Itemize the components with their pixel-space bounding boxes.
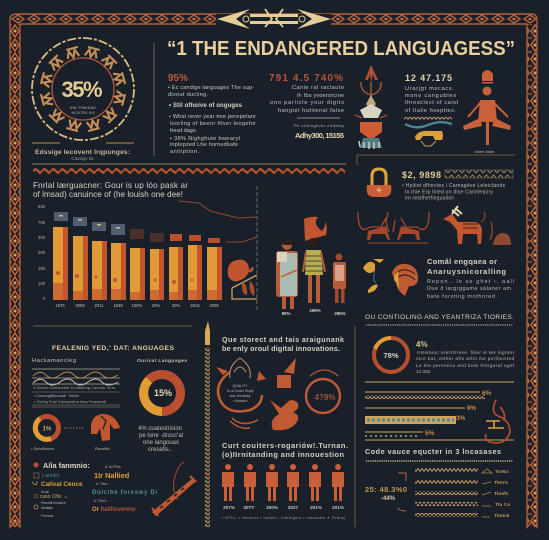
medallion caption: Edssige Iecovent lrqpunges: [35, 149, 130, 156]
top center ornament [216, 9, 331, 29]
x axis labels: 100% [132, 303, 143, 308]
dotted connector [64, 427, 84, 429]
icon: padlock [367, 169, 391, 197]
stat block: 95%: inplepzed Lhe hornedkafe [170, 142, 238, 148]
dotted divider [366, 324, 513, 326]
icon: tribal totem figure [355, 65, 387, 149]
pictogram row: 201% [310, 505, 322, 510]
person 5 [309, 464, 321, 501]
people figures with percentages [276, 217, 346, 316]
callout text: bate forsting mothored. [427, 294, 497, 300]
divider [153, 43, 155, 156]
stat block: 740%: hangtel hutitenal false [278, 108, 344, 114]
cycle diagram: Isas therdoby [229, 394, 251, 398]
percentage bars: 9% [467, 405, 477, 412]
x axis labels: 1548 [113, 303, 123, 308]
pattern rows: TlwYs [494, 480, 508, 486]
y axis labels: 0 [43, 296, 46, 301]
mixed typographic list: ☐ caso Cifix ..ω [34, 494, 68, 500]
icon caption: Intlex Main [475, 149, 494, 154]
y axis labels: 700 [38, 220, 46, 225]
pictogram row: 207% [223, 505, 235, 510]
donut text: 4% [416, 340, 428, 349]
icon: garment [91, 414, 120, 451]
donut chart: 15%: 15% [154, 388, 172, 398]
stat block: 17 175: Urarjgt mscacs. [405, 86, 454, 92]
icon: device and horn [270, 358, 298, 430]
medallion: 35% [32, 38, 134, 140]
donut text: oice bat, vother afio witin me perlisucted [416, 356, 514, 361]
figure 2 [303, 217, 327, 303]
stat block: 17 175: of Italie hsepties. [405, 108, 456, 114]
section divider and pattern band [32, 155, 515, 174]
callout text: Due d largrggame sàlaner am [427, 286, 512, 292]
icon: mirrored animals [358, 212, 429, 243]
icon: woven band and jaguar [404, 117, 452, 146]
mixed typographic list: Pannidl imoshce [41, 501, 66, 505]
people figures with percentages: 90% [282, 311, 290, 316]
x axis labels: 2516 [190, 303, 200, 308]
medallion caption [32, 143, 134, 161]
pictogram legend: ▪ NTICₛ ▪ Sensors ▪ Iloslis ▪ Callingers ▪ Innovatio ✦ Fediay [222, 516, 345, 520]
subheadings: Ourical Languages [137, 358, 187, 364]
stat block: 95%: • 38% Nighghute bwearyt [170, 136, 240, 142]
stat block: 95%: divout ducling. [168, 92, 208, 98]
x axis labels: 2011 [94, 303, 104, 308]
wave chart and legend: • Cnsronglfkisocad8 · Ihsfha [34, 394, 79, 398]
wave chart and legend: 4 Cboslv Aurisnshor Exitdalling Cacontr Intrs [33, 386, 115, 390]
y axis labels: 150 [38, 266, 46, 271]
icon: fruit and leaf [228, 260, 257, 299]
vertical text strip [205, 321, 210, 527]
mixed typographic list: ᐅ Iar Fhis [105, 465, 121, 469]
stat: 25:48.3: 25: 48.3%0 [365, 485, 407, 494]
icon: garment: Roustlet [95, 446, 111, 451]
icon: figure with crown [463, 70, 511, 145]
mixed typographic list [32, 461, 157, 518]
small donut: 1%: 1% [43, 426, 52, 432]
stat block: 740%: Ph outlingever efidatky [294, 123, 344, 128]
stat block: 95% [168, 73, 256, 155]
pictogram row: 20TY [244, 505, 254, 510]
medallion: 35%: EW, PNIKDAE [70, 105, 96, 110]
stat block: 740% [269, 73, 344, 140]
y axis labels: 300 [38, 235, 46, 240]
chart heading [33, 181, 188, 199]
stat block: 740%: Adhy300, 15155 [295, 131, 344, 140]
dotted divider [366, 460, 513, 462]
subheadings: Hackamancleg [32, 358, 76, 364]
icon: flute [152, 462, 196, 516]
donut text: Le the perninice and bute thilrgaral ogel [416, 363, 514, 368]
percentage bars: 3% [456, 415, 466, 422]
people figures with percentages: 285% [334, 311, 346, 316]
mixed typographic list: Lanckil [42, 473, 59, 479]
pictogram row [222, 464, 344, 510]
title: “1 THE ENDANGERED LANGUAGESS” [167, 38, 515, 60]
heading: turnan: (o)IIrnitanding and innouestion [222, 450, 344, 459]
icon: head in headdress with leaves [363, 259, 418, 296]
section heading: OU CONTIOLING AND YEANTRIZA TIORIES. [365, 314, 514, 321]
person 1 [222, 464, 234, 501]
lower-left divider [33, 325, 192, 327]
donut text [138, 426, 183, 453]
mixed typographic list: Kcusi [41, 490, 49, 494]
heading: digital innovations: Que storect and tais araigunank [222, 335, 344, 344]
donut: 479%: 4?9% [315, 393, 335, 402]
cap boxes [54, 212, 220, 243]
small donut: 1%: • Qinlufichuirs [31, 447, 54, 451]
pictogram row: 201% [332, 505, 344, 510]
stat block: 95%: antiiption. [170, 149, 199, 155]
percentage bars [365, 382, 514, 440]
x axis labels [55, 303, 219, 308]
donut text [416, 340, 515, 374]
heading: digital innovations [222, 335, 344, 353]
text block: • Hpiliot dfhectes l Carnagéve Leleiclands [402, 183, 506, 189]
heading: code value: Code vauce equcter in 3 lncasases [365, 447, 501, 456]
donut text: 12.302. [416, 369, 431, 374]
pattern rows: TorKs [495, 469, 509, 475]
percentage bars: 5% [425, 430, 435, 437]
person 6 [332, 464, 344, 501]
stat block: 740%: ono parlicle your digits [270, 100, 344, 106]
small donut: 1% [31, 416, 58, 451]
stat: 25:48.3 [365, 473, 407, 511]
callout text: Repon.. le se ghet ‹. aall [427, 279, 514, 285]
person 3 [266, 464, 278, 501]
medallion: 35%: 35% [62, 77, 102, 102]
x axis labels: 20% [152, 303, 160, 308]
x axis labels: 2006 [75, 303, 85, 308]
donut text: pe lone ·drosc‘al [139, 433, 183, 439]
donut text: Irmistuoc orerztrrese. fiber is tes ingrant [417, 350, 515, 355]
medallion caption: Caosign Ito. [71, 156, 95, 161]
pattern rows: Tloofs [494, 491, 509, 497]
stat block: 17 175 [405, 73, 458, 114]
stat block: 740%: if‹ Ibs yvoerorcine [297, 93, 344, 99]
stat block: 95%: 95% [168, 73, 188, 84]
heading: languages: FEALENIG YED,ʼ DAT: ANGUAGES [52, 345, 174, 352]
y axis labels: 200 [38, 250, 46, 255]
donut text: cresefis.. [148, 447, 172, 453]
heading: turnan: Curt couiters-rogariów!.Turnan. [222, 441, 348, 450]
y axis labels [38, 204, 46, 301]
percentage bars: 6% [482, 390, 492, 397]
stat block: 95%: fresd dags. [170, 128, 197, 134]
x axis labels: 20% [172, 303, 180, 308]
stat block: 95%: • Whal rever year tme perepelanr [169, 114, 256, 120]
chart heading: of lmsad) canuince of (he louish one dee! [33, 190, 183, 199]
x axis labels: 1975 [55, 303, 65, 308]
cycle diagram: • Mrasind [233, 399, 247, 403]
bar chart [38, 186, 257, 310]
donut: 78% [374, 338, 408, 372]
pattern rows: Tlonck [494, 513, 510, 519]
y axis labels: 100 [38, 281, 46, 286]
stat block: 17 175: 12 47.175 [405, 73, 452, 83]
donut text: one langouax [143, 440, 179, 446]
callout text [427, 257, 514, 300]
column divider [354, 326, 356, 527]
mixed typographic list: Dulclbe foreswy Di [92, 490, 157, 496]
stat: $2,9898 with pattern: $2, 9898 [402, 170, 441, 180]
text block: en restlherfiegualion [405, 196, 454, 202]
stat block: 17 175: thresclect of caist [405, 100, 458, 106]
cycle diagram: To al Coam Scpty [226, 389, 254, 393]
heading: turnan [222, 441, 348, 459]
pictogram row: 200% [266, 505, 278, 510]
text block [402, 183, 506, 202]
mixed typographic list: ᐅ Tfhe.... [96, 482, 111, 486]
stat: $2,9898 with pattern [402, 170, 513, 180]
icon: antlered animal and weave [443, 206, 511, 245]
bars [53, 227, 222, 300]
mixed typographic list: ᐅ Tihd ▪ [94, 499, 107, 503]
medallion: 35%: NOXTEK 8.6 [71, 110, 95, 115]
callout text: Anaruysnicoralling [427, 267, 506, 276]
cycle diagram: QUALITY [233, 384, 248, 388]
heading: digital innovations: be enly oroul digital innovations. [222, 344, 340, 353]
mixed typographic list: A/ía fanmnio: [43, 461, 90, 470]
pictogram row: 2027 [288, 505, 299, 510]
cycle diagram [216, 358, 266, 428]
y axis labels: 540 [38, 204, 46, 209]
callout text: Comâl engqaea or [427, 257, 497, 266]
subheadings [32, 358, 187, 364]
icon: spiral vessel [486, 400, 510, 443]
donut: 78%: 78% [383, 351, 399, 360]
text block: In thie Erp hiled on dise Cantlenjory [405, 190, 494, 196]
trend lines [179, 201, 257, 242]
stat block: 17 175: mono cangubles [405, 93, 456, 99]
stat: 25:48.3: -44% [381, 496, 396, 502]
wave chart and legend [32, 369, 120, 407]
wave chart and legend: • Ytding Fhal Cavsyestha Ihan Pearshatt [34, 400, 106, 404]
figure 1 [276, 238, 298, 309]
mixed typographic list: Frerocin [41, 514, 54, 518]
mixed typographic list: Or Ilalillovenno [92, 507, 136, 513]
stat block: 740%: Canie ral raclaute [292, 85, 344, 91]
person 4 [287, 464, 299, 501]
person 2 [244, 464, 256, 501]
mixed typographic list: 1Ir Nallied [94, 471, 130, 480]
stat block: 740%: 791 4.5 740% [269, 73, 343, 84]
stat block: 95%: • Stil ofhoive of onguges [169, 103, 243, 109]
donut text: 4% cuatestrision [138, 426, 182, 432]
x axis labels: 2006 [209, 303, 219, 308]
pattern rows [415, 468, 510, 519]
people figures with percentages: 299% [309, 308, 321, 313]
donut chart: 15% [144, 374, 180, 412]
mixed typographic list: Calival Cence [41, 481, 83, 488]
chart heading: Fnrlal lærguacner: Gour is up lóo pask ar [33, 181, 188, 190]
figure 3 [333, 254, 346, 303]
stat block: 95%: loorilng of beenr Ittver lengefor [170, 121, 256, 127]
donut: 479% [306, 370, 340, 413]
stat block: 95%: • Ec candige languages The sup- [168, 85, 254, 91]
pattern rows: Tlu Y.a [495, 502, 510, 508]
mixed typographic list: Medlals [41, 506, 53, 510]
